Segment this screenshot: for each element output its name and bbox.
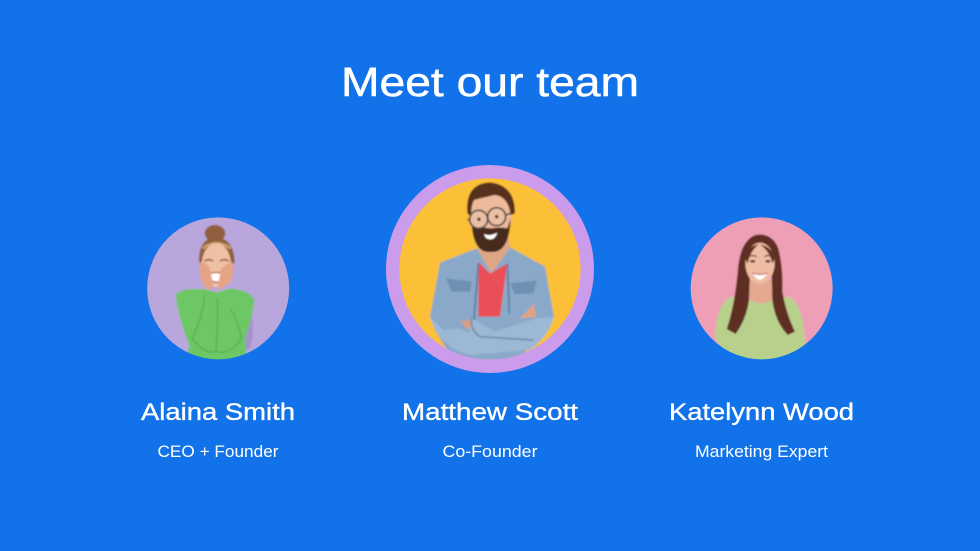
team member: Katelynn Wood bbox=[669, 215, 854, 461]
role: Marketing Expert: Marketing Expert bbox=[695, 442, 828, 461]
title: Meet our team bbox=[341, 59, 639, 105]
name: Alaina Smith: Alaina Smith bbox=[141, 399, 295, 426]
team member: Matthew Scott bbox=[386, 165, 594, 461]
role: CEO + Founder: CEO + Founder bbox=[158, 442, 279, 461]
portrait: Katelynn Wood bbox=[688, 215, 835, 362]
portrait: Alaina Smith bbox=[143, 215, 293, 362]
portrait: Matthew Scott bbox=[386, 165, 594, 373]
team member: Alaina Smith bbox=[141, 215, 295, 461]
name: Matthew Scott: Matthew Scott bbox=[402, 399, 578, 426]
name: Katelynn Wood: Katelynn Wood bbox=[669, 399, 854, 426]
role: Co-Founder: Co-Founder bbox=[442, 442, 538, 461]
